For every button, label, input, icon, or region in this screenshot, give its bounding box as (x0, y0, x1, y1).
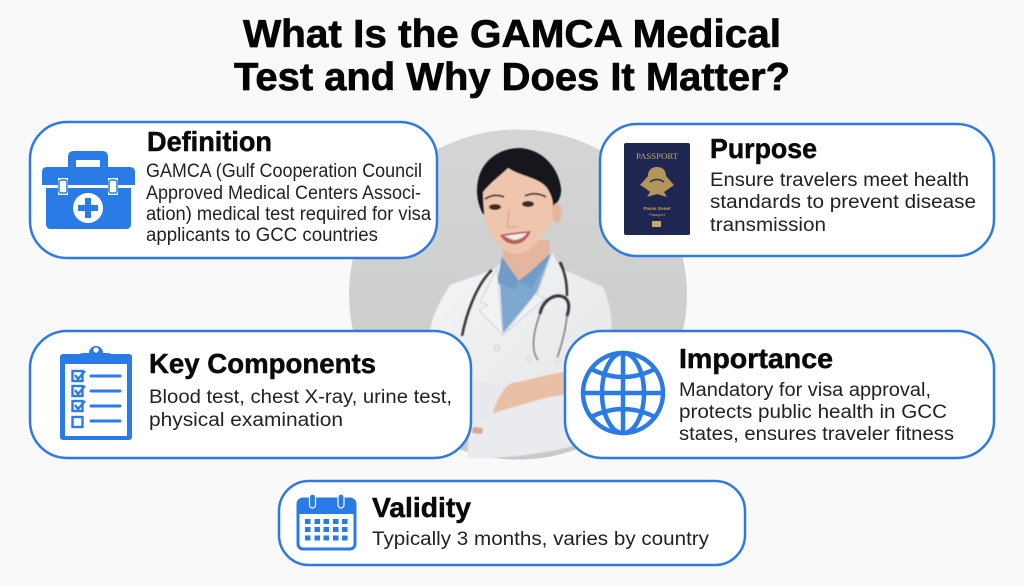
icon: medical kit (42, 151, 135, 229)
panel: importance (565, 331, 994, 458)
text: purpose body: standards to prevent disease (710, 192, 976, 213)
icon: passport: Passe Genet (643, 206, 671, 211)
text: importance body: Mandatory for visa approval, (679, 380, 931, 401)
heading: definition: Definition (147, 126, 272, 157)
panel: definition (30, 122, 437, 258)
icon: calendar (298, 494, 355, 549)
text: definition body (146, 161, 431, 246)
icon: passport: PASSPORT (636, 152, 678, 161)
coat button (494, 345, 500, 351)
icon: passport (624, 143, 690, 235)
panel: key components (30, 331, 471, 458)
text: definition body: applicants to GCC countries (146, 225, 378, 246)
doctor figure (430, 148, 612, 458)
text: importance body: protects public health in GCC (679, 402, 947, 423)
text: purpose body: Ensure travelers meet health (710, 170, 969, 191)
blue shirt (497, 252, 552, 333)
grey circle backdrop (349, 130, 687, 460)
ear (552, 203, 562, 223)
icon: passport: Passport (649, 212, 666, 217)
stethoscope (462, 262, 569, 365)
coat body (430, 252, 612, 458)
neck (503, 240, 550, 290)
coat lapels (479, 252, 552, 335)
brows, eyes, nose and smile (485, 194, 546, 244)
text: key components body: physical examination (149, 410, 343, 431)
title (234, 13, 790, 99)
text: purpose body (710, 170, 976, 236)
heading: validity: Validity (372, 492, 471, 523)
title: What Is the GAMCA Medical (243, 13, 781, 56)
heading: importance: Importance (679, 343, 833, 374)
icon: globe (583, 353, 663, 433)
face (483, 168, 553, 254)
text: key components body: Blood test, chest X-ray, urine test, (149, 387, 452, 408)
folded arms (470, 382, 510, 430)
text: validity body: Typically 3 months, varies by country (372, 529, 710, 550)
text: importance body: states, ensures traveler fitness (679, 424, 954, 445)
hair (477, 148, 561, 214)
title: Test and Why Does It Matter? (234, 56, 790, 99)
heading: purpose: Purpose (710, 133, 817, 164)
central doctor portrait (349, 130, 687, 460)
text: key components body (149, 387, 452, 431)
text: definition body: ation) medical test required for visa (146, 204, 431, 225)
text: definition body: GAMCA (Gulf Cooperation Council (146, 161, 422, 182)
text: purpose body: transmission (710, 215, 826, 236)
heading: key components: Key Components (149, 348, 376, 379)
panel: purpose (600, 124, 994, 256)
text: importance body (679, 380, 954, 445)
panel: validity (279, 481, 745, 565)
icon: clipboard checklist (60, 346, 132, 440)
text: definition body: Approved Medical Centers Associ- (146, 183, 421, 204)
